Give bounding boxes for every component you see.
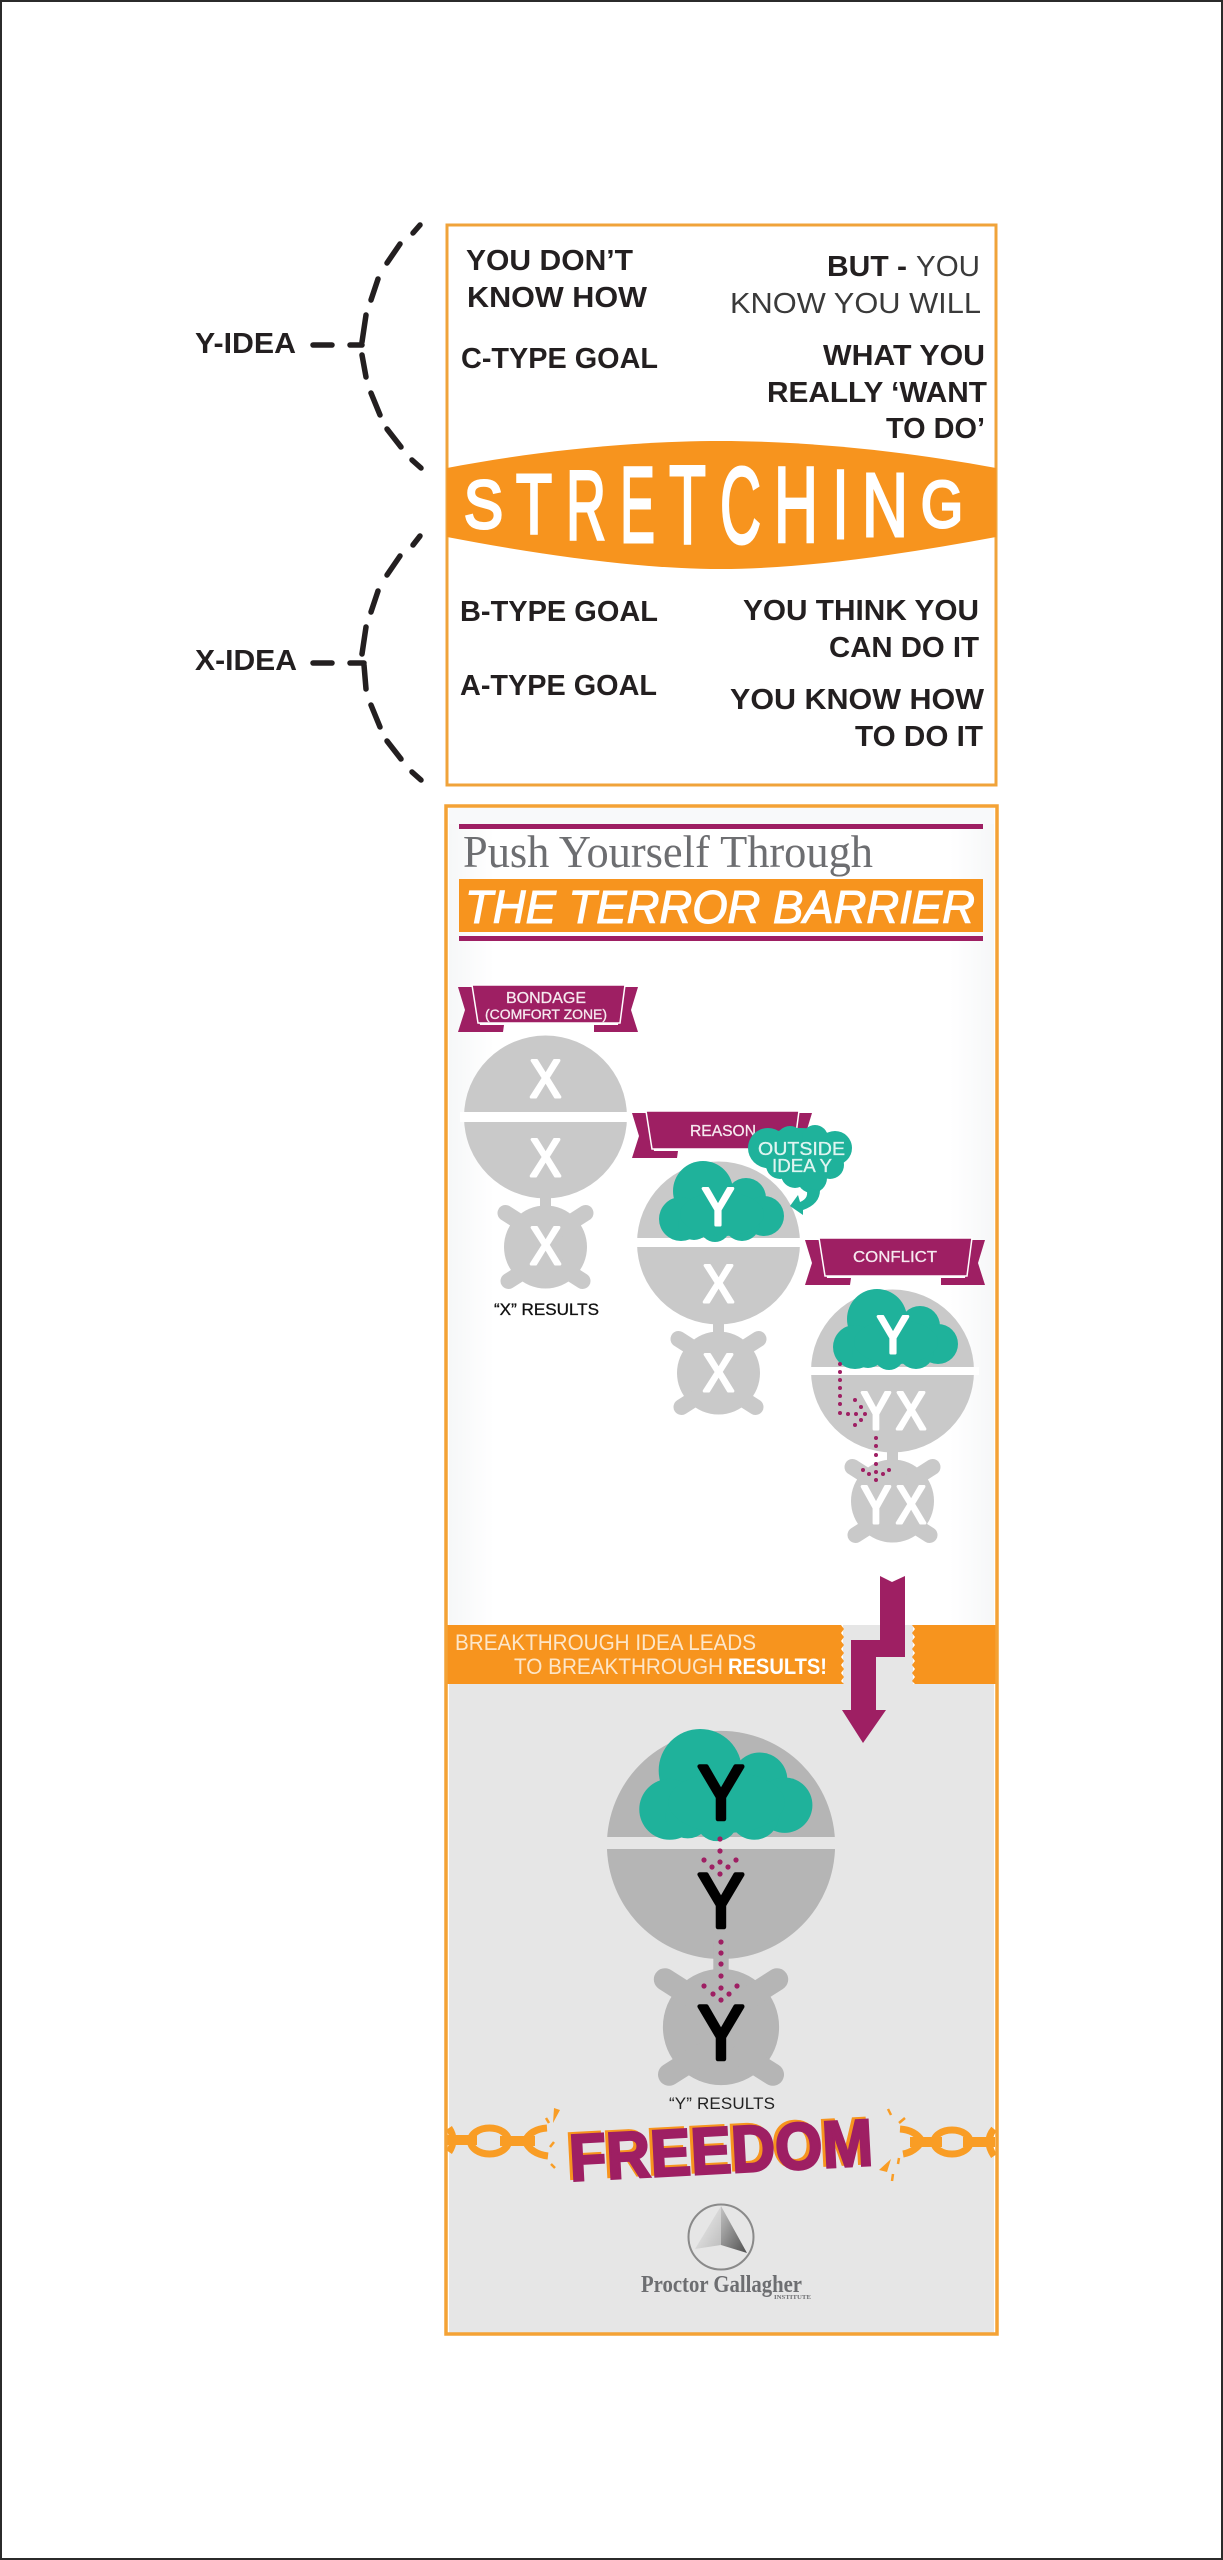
- panel border: [446, 806, 997, 2334]
- figure: y results stick person: Y: [698, 1751, 744, 1836]
- ribbon: conflict: [805, 1238, 985, 1285]
- X-idea label with dashed bracket: X-IDEA: [195, 645, 297, 677]
- ribbon: reason: REASON: [690, 1123, 756, 1140]
- logo: proctor gallagher: Proctor Gallagher: [641, 2272, 802, 2298]
- banner: stretching: T: [669, 443, 706, 567]
- text: what you really want to do: WHAT YOU: [823, 340, 985, 372]
- band: breakthrough idea: RESULTS!: [728, 1654, 827, 1679]
- text: you think you can do it: [743, 595, 979, 664]
- figure: conflict yx: X: [896, 1476, 926, 1535]
- text: but you know you will: BUT -: [827, 251, 907, 283]
- figure: conflict yx: Y: [877, 1306, 909, 1365]
- text: b-type goal: B-TYPE GOAL: [460, 596, 658, 628]
- Y-idea label with dashed bracket: Y-IDEA: [195, 328, 296, 360]
- ribbon: bondage: [458, 985, 638, 1032]
- text: a-type goal: A-TYPE GOAL: [460, 670, 657, 702]
- figure: conflict yx: Y: [861, 1476, 891, 1535]
- chain: left broken: [447, 2108, 560, 2168]
- chain: right broken: [879, 2109, 995, 2181]
- title block: [459, 824, 983, 941]
- text: what you really want to do: [767, 340, 987, 445]
- title block: Push Yourself Through: [463, 826, 873, 877]
- banner: stretching: G: [921, 467, 963, 541]
- figure: conflict yx: X: [896, 1382, 926, 1441]
- figure: x idea stick person: X: [530, 1050, 561, 1109]
- text: what you really want to do: TO DO’: [886, 413, 985, 445]
- logo: proctor gallagher: INSTITUTE: [774, 2294, 811, 2301]
- title block: THE TERROR BARRIER: [465, 881, 975, 933]
- heading: freedom: FREEDOM: [567, 2105, 875, 2195]
- band: breakthrough idea: TO BREAKTHROUGH: [514, 1654, 723, 1679]
- logo: proctor gallagher: [641, 2204, 811, 2301]
- text: but you know you will: KNOW YOU WILL: [730, 288, 981, 320]
- figure: x idea stick person: [460, 1036, 632, 1288]
- X-idea label with dashed bracket: [195, 536, 421, 780]
- text: you know how to do it: YOU KNOW HOW: [730, 684, 985, 716]
- banner: stretching: H: [774, 444, 818, 565]
- banner: stretching: R: [566, 450, 606, 560]
- text: but you know you will: YOU: [916, 251, 980, 283]
- text: what you really want to do: REALLY ‘WANT: [767, 377, 987, 409]
- Y-idea label with dashed bracket: [195, 225, 421, 468]
- text: you don't know how: KNOW HOW: [467, 282, 648, 314]
- ribbon: bondage: BONDAGE: [506, 990, 586, 1007]
- band: breakthrough idea: BREAKTHROUGH IDEA LEADS: [455, 1630, 756, 1655]
- figure: x idea stick person: X: [530, 1129, 561, 1188]
- figure: x idea stick person: X: [530, 1217, 561, 1276]
- figure: y results stick person: [603, 1729, 839, 2085]
- callout: outside idea y: OUTSIDE: [758, 1138, 845, 1159]
- ribbon: conflict: CONFLICT: [853, 1249, 937, 1266]
- text: you know how to do it: [730, 684, 985, 753]
- figure: conflict yx: [807, 1289, 979, 1542]
- banner: stretching: [447, 441, 996, 569]
- panel: goals stretching: [447, 225, 996, 785]
- text: you don't know how: YOU DON’T: [466, 245, 633, 277]
- callout: outside idea y: [748, 1125, 852, 1215]
- text: you think you can do it: CAN DO IT: [829, 632, 979, 664]
- banner: stretching: E: [620, 444, 655, 565]
- arrow: lightning breakthrough: [842, 1576, 905, 1743]
- figure: y results stick person: Y: [698, 1859, 744, 1944]
- band: breakthrough idea: [446, 1625, 997, 1684]
- caption: x results: “X” RESULTS: [494, 1301, 599, 1319]
- panel: terror barrier: [446, 806, 997, 2334]
- figure: y idea enters: X: [703, 1255, 734, 1314]
- text: c-type goal: C-TYPE GOAL: [461, 343, 658, 375]
- banner: stretching: N: [862, 456, 908, 556]
- figure: y results stick person: Y: [698, 1991, 744, 2076]
- banner: stretching: T: [516, 457, 552, 551]
- figure: conflict yx: Y: [861, 1382, 891, 1441]
- callout: outside idea y: IDEA Y: [772, 1155, 832, 1176]
- text: you think you can do it: YOU THINK YOU: [743, 595, 979, 627]
- ribbon: reason: [632, 1111, 812, 1158]
- text: you know how to do it: TO DO IT: [855, 721, 983, 753]
- text: you don't know how: [466, 245, 648, 314]
- banner: stretching: C: [720, 445, 761, 567]
- ribbon: bondage: (COMFORT ZONE): [485, 1007, 607, 1022]
- banner: stretching: I: [832, 450, 848, 559]
- banner: stretching: S: [464, 467, 503, 543]
- figure: y idea enters: X: [703, 1344, 734, 1403]
- caption: y results: “Y” RESULTS: [669, 2094, 775, 2113]
- figure: y idea enters: Y: [702, 1178, 734, 1237]
- figure: y idea enters: [633, 1161, 805, 1414]
- heading: freedom: FREEDOM: [564, 2103, 872, 2193]
- text: but you know you will: [730, 251, 981, 320]
